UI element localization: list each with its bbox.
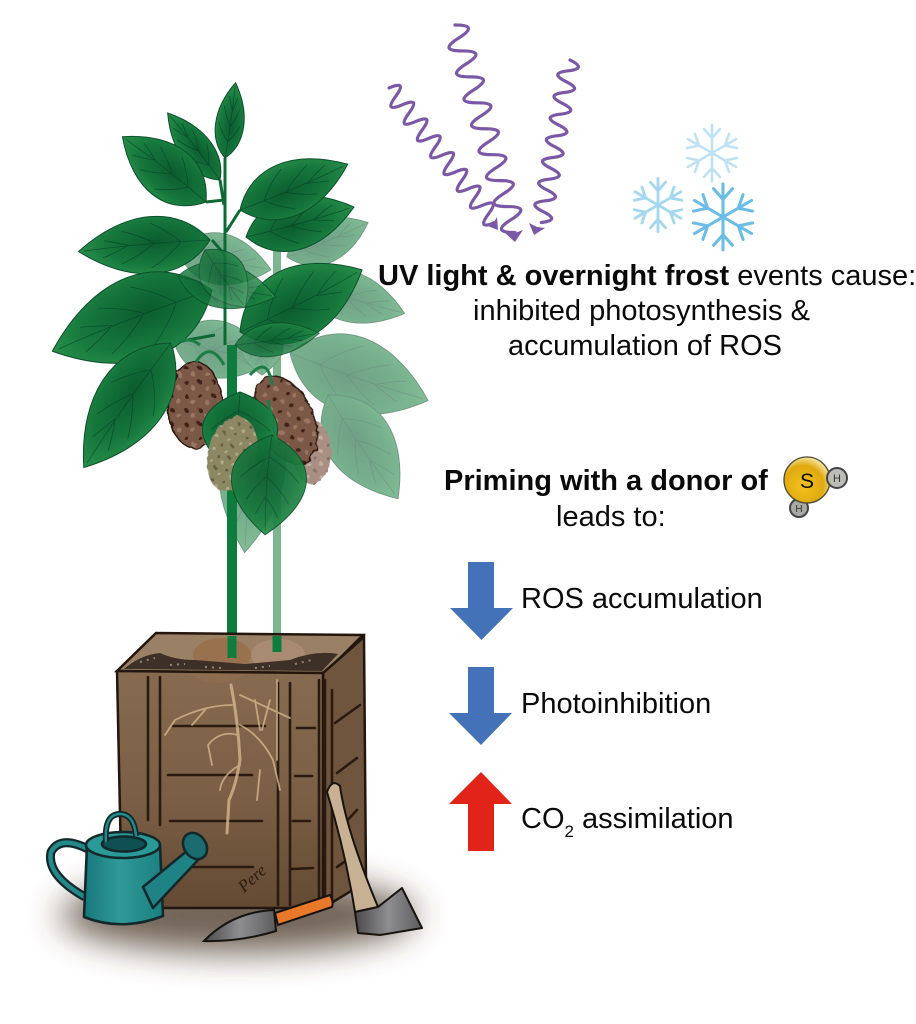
tubers [193, 638, 305, 672]
fruit right [242, 366, 330, 474]
dark leaves [37, 81, 378, 487]
text: stress cause: UV light & overnight frost events cause: [378, 260, 916, 292]
green stems in soil [232, 636, 277, 658]
text: priming heading: leads to: [556, 501, 666, 533]
icon: H2S molecule: S [800, 470, 814, 493]
wave 1 [381, 82, 503, 229]
label: CO2 assimilation: assimilation [574, 803, 734, 835]
axe handle [327, 783, 378, 912]
can rear handle [50, 843, 88, 897]
fruit left [168, 362, 222, 448]
icon: snowflakes [634, 125, 752, 250]
front lower leaf [228, 432, 309, 537]
arrow: photoinhibition decrease [449, 667, 512, 745]
light snowflake [687, 125, 737, 181]
text: stress cause: accumulation of ROS [508, 330, 782, 362]
transparent fruit [293, 420, 331, 484]
crate top back wall [117, 633, 363, 673]
fruit stalks [171, 340, 276, 440]
icon: trowel [204, 895, 333, 941]
pale leaves [167, 181, 440, 555]
wave 2 [443, 22, 526, 236]
roots [165, 680, 290, 833]
text: stress cause [378, 260, 916, 362]
icon: watering can [50, 814, 212, 924]
soil gravel [140, 658, 312, 668]
axe head [355, 888, 422, 935]
arrow: CO2 increase [449, 772, 512, 851]
crate side face [323, 637, 366, 908]
illustration: dark plant [37, 81, 378, 650]
arrow: ROS decrease [450, 562, 513, 640]
illustration: wooden crate [117, 633, 366, 908]
label: CO2 assimilation: 2 [564, 822, 574, 841]
soil [124, 653, 338, 671]
can spout [143, 850, 200, 908]
can body [84, 845, 163, 924]
can top handle [106, 814, 136, 842]
icon: H2S molecule: H [833, 473, 841, 485]
green-tinted fruit [199, 411, 265, 497]
label: photoinhibition: Photoinhibition [521, 688, 711, 720]
plank seams and dark battens [148, 677, 360, 905]
trowel blade [204, 910, 276, 941]
can rose [178, 828, 212, 864]
uv light wavy arrows [381, 22, 579, 236]
crate front face [117, 671, 323, 908]
mid snowflake [634, 178, 682, 232]
stems [171, 158, 240, 345]
illustration: transparent plant (primed) behind [167, 181, 440, 642]
under-soil tuber [190, 674, 246, 683]
wave 3 [532, 58, 579, 224]
label: ROS accumulation: ROS accumulation [521, 583, 763, 615]
text: stress cause: inhibited photosynthesis & [473, 295, 810, 327]
pale stem [273, 250, 281, 642]
icon: axe [327, 783, 422, 935]
uv arrowheads [485, 217, 545, 242]
center overlay leaves [173, 237, 321, 361]
icon: H2S molecule [784, 457, 847, 517]
ground shadow under crate and tools [60, 877, 416, 953]
icon: H2S molecule: H [795, 504, 803, 515]
text: priming heading: Priming with a donor of [444, 465, 768, 497]
text: priming heading [444, 465, 768, 533]
label: CO2 assimilation: CO [521, 803, 564, 835]
blue snowflake [694, 184, 752, 250]
trowel handle [275, 895, 333, 925]
signature: Pere [233, 860, 270, 897]
